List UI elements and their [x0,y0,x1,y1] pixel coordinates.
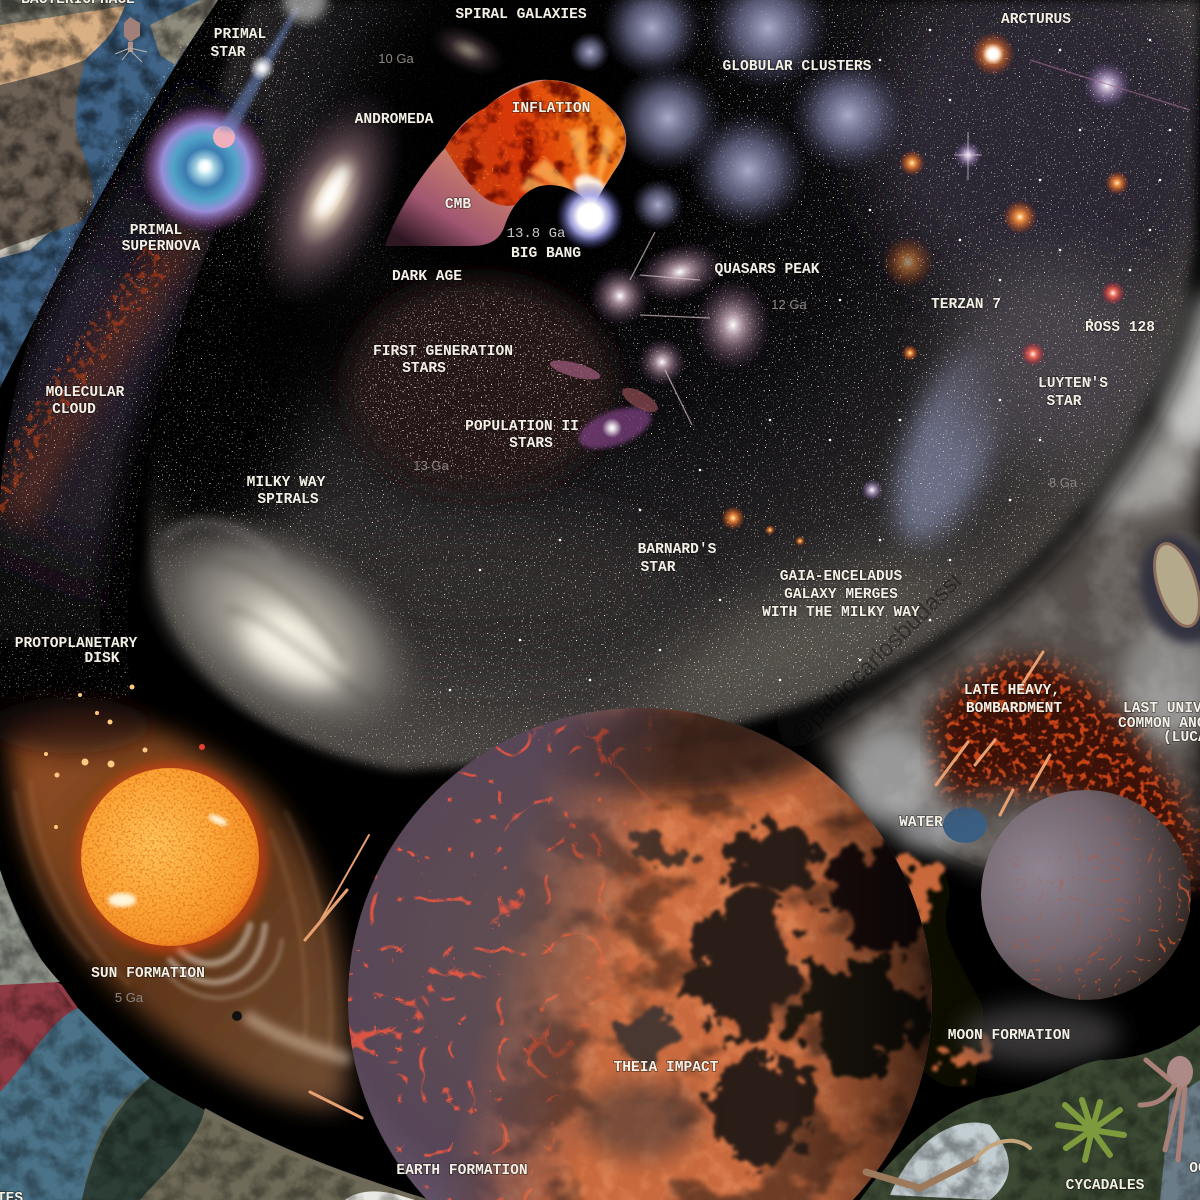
label: first generation stars: FIRST GENERATION [373,344,513,360]
planet: earth during theia impact [340,700,950,1200]
moon [980,790,1192,1002]
label: 13.8 Ga big bang: 13.8 Ga [507,226,565,242]
label: primal star: PRIMAL [214,27,266,43]
label: 8 Ga: 8 Ga [1049,475,1078,490]
label: milky way spirals: SPIRALS [257,492,319,508]
bright stars [721,32,1190,546]
label: protoplanetary disk: DISK [84,651,120,667]
land: bottom-left earth surface [0,870,430,1200]
label: terzan 7: TERZAN 7 [931,297,1001,313]
icon: octopus [1140,1056,1193,1160]
label: primal supernova: SUPERNOVA [122,239,201,255]
label: late heavy bombardment: BOMBARDMENT [966,701,1062,717]
label: CMB: CMB [445,197,471,213]
label: quasars peak: QUASARS PEAK [714,262,820,278]
label: dark age: DARK AGE [392,269,462,285]
label: primal supernova: PRIMAL [130,223,182,239]
label: barnard's star: STAR [640,560,676,576]
label: water: WATER [899,815,943,831]
label: primal star: STAR [210,45,246,61]
label: gaia-enceladus: GAIA-ENCELADUS [780,569,903,585]
label: late heavy bombardment: LATE HEAVY, [964,683,1060,699]
label: luyten's star: STAR [1046,394,1082,410]
label: arcturus: ARCTURUS [1001,12,1071,28]
label: andromeda: ANDROMEDA [355,112,434,128]
disk sparks [44,684,205,829]
sun [76,762,268,954]
scattered bright stars [450,30,1170,690]
meteorites [305,652,1050,1118]
andromeda galaxy [224,66,436,330]
label: inflation: INFLATION [512,101,590,117]
spiral galaxy (top) [422,13,514,87]
label: milky way spirals: MILKY WAY [247,475,326,491]
label: population II stars: POPULATION II [465,419,579,435]
label: theia impact: THEIA IMPACT [613,1060,719,1076]
icon: sea scorpion [866,1141,1030,1188]
lava field: late heavy bombardment [920,630,1200,900]
impact spill beyond the planet [880,855,986,1088]
globular clusters [570,0,906,231]
label: moon formation: MOON FORMATION [948,1028,1070,1044]
label: big bang: BIG BANG [511,246,581,262]
dark band between galaxy and clouds [780,240,1200,735]
smoke between moon and earth [960,1005,1120,1065]
label: sun formation: SUN FORMATION [91,966,205,982]
land: bottom-right green terrain [860,1025,1200,1200]
label: 13 Ga: 13 Ga [413,458,449,473]
label: globular clusters: GLOBULAR CLUSTERS [723,59,872,75]
label: spiral galaxies: SPIRAL GALAXIES [455,7,587,23]
quasars and population II galaxies [548,232,771,457]
protoplanetary disk [0,684,350,1107]
label: gaia-enceladus: WITH THE MILKY WAY [762,605,920,621]
big bang [556,182,624,250]
label: population II stars: STARS [509,436,553,452]
bacterium LUCA [1127,526,1200,654]
milky way spirals [93,458,477,802]
label: 5 Ga: 5 Ga [115,990,144,1005]
land: right side clouds [815,280,1200,880]
label: 12 Ga: 12 Ga [771,297,807,312]
spiral band: molecular cloud [0,0,300,720]
label: protoplanetary disk: PROTOPLANETARY [15,636,138,652]
label: molecular cloud: CLOUD [52,402,96,418]
label: earth formation: EARTH FORMATION [396,1163,528,1179]
label: luyten's star: LUYTEN'S [1038,376,1108,392]
first generation stars [345,277,615,495]
label: ross 128: ROSS 128 [1085,320,1155,336]
primal star with jet [218,0,327,132]
inflation and CMB [385,80,626,246]
label: 10 Ga: 10 Ga [378,51,414,66]
galaxy region background [142,0,1200,778]
label: first generation stars: STARS [402,361,446,377]
land: top-left desert and coast [0,0,220,390]
watermark: @pablocarlosbudassi [785,568,967,749]
primal supernova [139,102,271,234]
icon: bacteriophage [115,17,147,62]
icon: cycad [1058,1100,1124,1160]
label: gaia-enceladus: GALAXY MERGES [784,587,898,603]
label: barnard's star: BARNARD'S [638,542,717,558]
label: molecular cloud: MOLECULAR [46,385,125,401]
label: cycadales: CYCADALES [1066,1178,1145,1194]
